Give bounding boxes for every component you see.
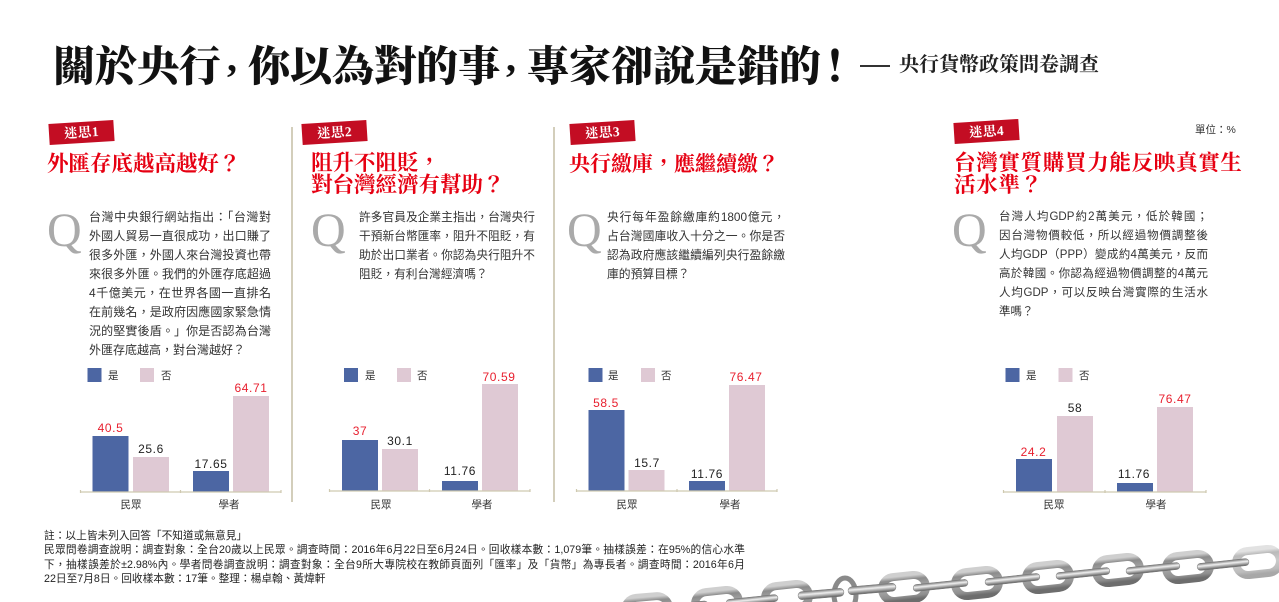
bar chart: myth 1: 64.71 (234, 381, 268, 395)
footnote: 民眾問卷調查說明：調查對象：全台20歲以上民眾。調查時間：2016年6月22日至6月24日。回收樣本數：1,079筆。抽樣誤差：在95%的信心水準 (44, 544, 745, 556)
bar chart: myth 3: 民眾 (616, 499, 638, 511)
bar chart: myth 2: 70.59 (482, 370, 516, 384)
heading: myth 4: 台灣實質購買力能反映真實生 (954, 151, 1243, 175)
bar chart: myth 4: 是 (1026, 370, 1037, 382)
question text: 因台灣物價較低，所以經過物價調整後 (999, 230, 1208, 242)
unit label: 單位：% (1195, 124, 1236, 136)
question text: 占台灣國庫收入十分之一。你是否 (607, 229, 785, 243)
footnote: 下，抽樣誤差於±2.98%內。學者問卷調查說明：調查對象：全台9所大專院校在教師頁面列「匯率」及「貨幣」為專長者。調查時間：2016年6月 (44, 559, 745, 571)
tag: myth 1 (48, 120, 115, 145)
panel: myth 4 (952, 119, 1243, 318)
question text (999, 210, 1208, 318)
footnote: 註：以上皆未列入回答「不知道或無意見」 (44, 530, 247, 542)
bar chart: myth 2: 學者 (472, 498, 492, 511)
bar chart: myth 1: 40.5 (98, 421, 123, 435)
bar chart: myth 3: 15.7 (634, 456, 660, 470)
bar chart: myth 4: 學者 (1146, 498, 1166, 511)
bar chart: myth 3 (576, 368, 778, 511)
tag: myth 3 (569, 120, 636, 145)
bar chart: myth 1: 民眾 (120, 499, 142, 511)
question text (607, 210, 785, 281)
bar chart: myth 2: 30.1 (387, 434, 413, 448)
bar chart: myth 4: 11.76 (1118, 467, 1150, 481)
bar chart: myth 3: 11.76 (691, 467, 723, 481)
heading: myth 2 (311, 151, 505, 197)
question text: 許多官員及企業主指出，台灣央行 (359, 211, 535, 224)
title: 關於央行 你以為對的事 專家卻說是錯的 (53, 45, 821, 91)
heading: myth 1: 外匯存底越高越好？ (47, 152, 241, 176)
tag: myth 4 (953, 119, 1020, 144)
question text: 人均GDP，可以反映台灣實際的生活水 (999, 287, 1208, 299)
bar chart: myth 4: 民眾 (1044, 499, 1065, 511)
bar chart: myth 4: 58 (1068, 401, 1082, 415)
heading: myth 4: 活水準？ (954, 173, 1043, 197)
bar chart: myth 2 (328, 368, 531, 511)
bar chart: myth 4: 否 (1079, 370, 1090, 382)
title: , (227, 35, 237, 80)
heading: myth 2: 阻升不阻貶， (311, 151, 440, 175)
bar chart: myth 3: 58.5 (593, 396, 619, 410)
question text: 高於韓國。你認為經過物價調整的4萬元 (999, 268, 1208, 280)
heading: myth 2: 對台灣經濟有幫助？ (311, 173, 505, 197)
bar chart: myth 3: 是 (608, 370, 619, 382)
question text (359, 210, 535, 281)
bar chart: myth 1 (80, 368, 282, 511)
bar chart: myth 4: 76.47 (1158, 392, 1192, 406)
footnote (44, 530, 745, 585)
divider (553, 127, 555, 502)
question text: 準嗎？ (999, 306, 1034, 318)
bar chart: myth 4: 24.2 (1021, 445, 1046, 459)
tag: myth 3: 迷思3 (584, 124, 621, 141)
bar chart: myth 4 (1002, 368, 1207, 511)
question text: 在前幾名，是政府因應國家緊急情 (89, 305, 271, 319)
bar chart: myth 2: 民眾 (370, 499, 392, 511)
bar chart: myth 2: 是 (365, 370, 376, 382)
question text: 阻貶，有利台灣經濟嗎？ (359, 268, 488, 281)
question text: 台灣中央銀行網站指出：「台灣對 (89, 210, 271, 224)
question text (89, 210, 271, 357)
bar chart: myth 3: 76.47 (729, 370, 763, 384)
question text: 認為政府應該繼續編列央行盈餘繳 (607, 248, 785, 262)
Q mark: Q (311, 204, 346, 257)
heading: myth 4 (954, 151, 1243, 197)
heading: myth 3: 央行繳庫，應繼續繳？ (569, 152, 779, 176)
question text: 助於出口業者。你認為央行阻升不 (359, 249, 535, 262)
bar chart: myth 3: 學者 (720, 498, 740, 511)
question text: 央行每年盈餘繳庫約1800億元， (607, 210, 785, 224)
title: ！ (814, 45, 856, 91)
question text: 外匯存底越高，對台灣越好？ (89, 343, 245, 357)
bar chart: myth 2: 37 (353, 424, 367, 438)
question text: 外國人貿易一直很成功，出口賺了 (89, 229, 271, 243)
bar chart: myth 1: 17.65 (194, 457, 228, 471)
question text: 來很多外匯。我們的外匯存底超過 (89, 267, 271, 281)
tag: myth 2 (301, 120, 368, 145)
Q mark: Q (952, 204, 987, 257)
question text: 庫的預算目標？ (607, 267, 690, 281)
Q mark: Q (47, 204, 82, 257)
bar chart: myth 1: 是 (108, 370, 119, 382)
question text: 台灣人均GDP約2萬美元，低於韓國； (999, 211, 1208, 223)
bar chart: myth 1: 學者 (218, 498, 240, 511)
Q mark: Q (567, 204, 602, 257)
panel: myth 3 (567, 120, 785, 281)
bar chart: myth 1: 25.6 (138, 442, 164, 456)
subtitle dash (860, 65, 890, 67)
question text: 很多外匯，外國人來台灣投資也帶 (89, 248, 271, 262)
divider (291, 127, 293, 502)
bar chart: myth 2: 否 (417, 370, 428, 382)
question text: 4千億美元，在世界各國一直排名 (89, 286, 271, 300)
panel: myth 1 (47, 120, 271, 357)
bar chart: myth 1: 否 (161, 370, 172, 382)
bar chart: myth 3: 否 (661, 370, 672, 382)
bar chart: myth 2: 11.76 (444, 464, 476, 478)
panel: myth 2 (301, 120, 535, 281)
question text: 干預新台幣匯率，阻升不阻貶，有 (359, 230, 535, 243)
question text: 況的堅實後盾。」你是否認為台灣 (89, 324, 271, 338)
subtitle: 央行貨幣政策問卷調查 (899, 54, 1099, 76)
title: , (506, 35, 516, 80)
tag: myth 4: 迷思4 (968, 123, 1005, 140)
footnote: 22日至7月8日。回收樣本數：17筆。整理：楊卓翰、黃煒軒 (44, 573, 325, 585)
question text: 人均GDP（PPP）變成約4萬美元，反而 (999, 249, 1208, 261)
tag: myth 2: 迷思2 (316, 124, 353, 141)
tag: myth 1: 迷思1 (63, 124, 100, 141)
